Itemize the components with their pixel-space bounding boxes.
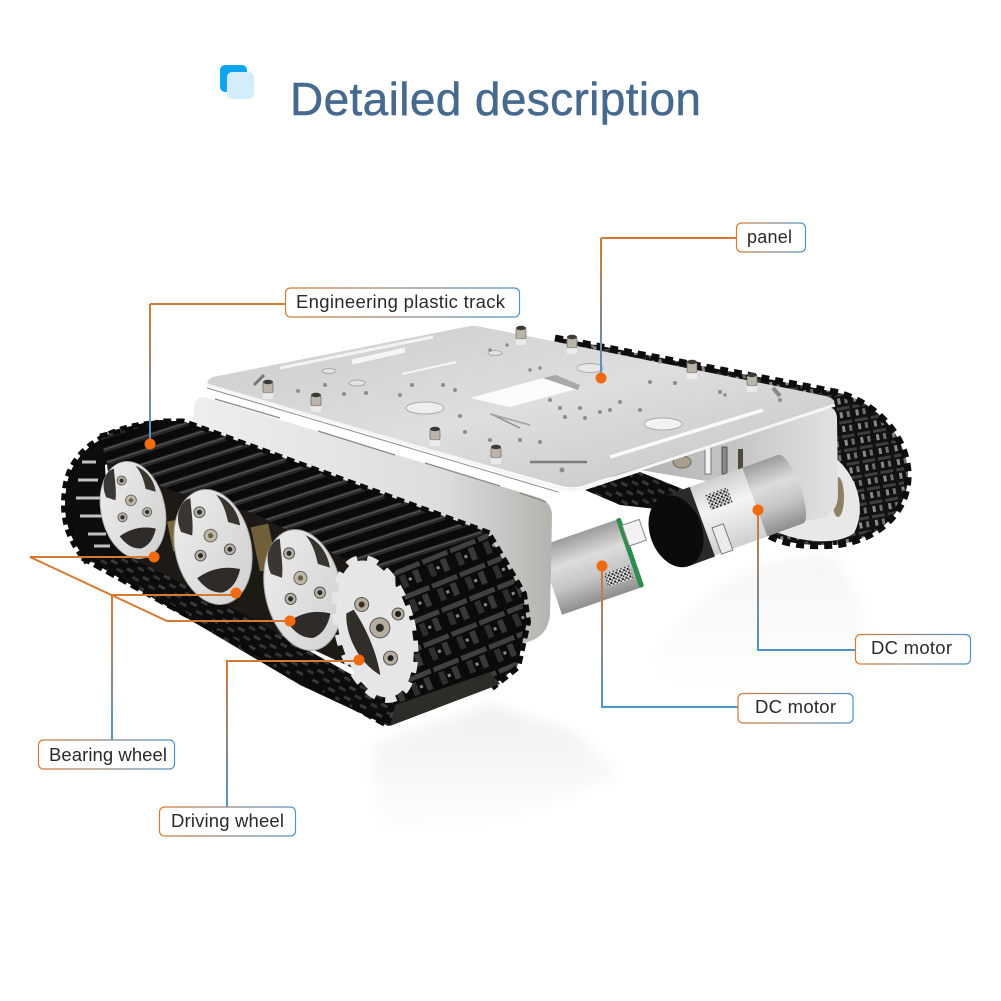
label: Driving wheel: Driving wheel (171, 810, 284, 831)
label: DC motor front (738, 694, 853, 723)
track interior (105, 450, 400, 690)
label: panel: panel (747, 227, 792, 247)
label: DC motor rear (856, 634, 970, 664)
bracket slots (673, 447, 743, 474)
leader: bearing wheel (30, 557, 290, 740)
leader: panel (600, 238, 736, 378)
wheel 2 (164, 482, 262, 612)
label: Driving wheel (160, 807, 296, 836)
leader: DC motor rear (757, 510, 855, 651)
label: DC motor front: DC motor (755, 696, 836, 717)
leader: DC motor front (601, 566, 738, 708)
dark track seen under panel (585, 472, 690, 510)
motor: rear with black cap (639, 451, 813, 575)
header icon: overlapping squares (220, 65, 254, 99)
top panel (207, 326, 835, 492)
panel slots and cut-outs (254, 337, 782, 472)
track back loop (65, 424, 165, 565)
track top band (100, 421, 490, 585)
wheel 3 (253, 522, 353, 658)
label: Bearing wheel: Bearing wheel (49, 744, 167, 765)
label: Engineering plastic track (286, 288, 520, 317)
rear right track (555, 337, 908, 546)
leader: engineering plastic track (149, 304, 285, 443)
motor: front (538, 512, 660, 615)
small metal axles (167, 519, 187, 551)
rear wheel (772, 450, 858, 540)
left track (65, 421, 528, 726)
title: Detailed description (290, 73, 701, 125)
leader: driving wheel (226, 661, 359, 807)
driving wheel (322, 550, 428, 708)
label: Engineering plastic track: Engineering plastic track (296, 291, 506, 312)
label: panel (736, 223, 806, 252)
label: DC motor rear: DC motor (871, 637, 952, 658)
label: Bearing wheel (38, 740, 174, 769)
panel standoffs (263, 326, 757, 464)
left chassis side plate (190, 397, 552, 652)
track front end (388, 533, 527, 726)
track bottom band (82, 555, 420, 726)
right end bracket (590, 407, 838, 522)
marker dots (144, 372, 764, 666)
wheel 1 (92, 455, 174, 565)
floor reflections of the tank (372, 555, 868, 835)
